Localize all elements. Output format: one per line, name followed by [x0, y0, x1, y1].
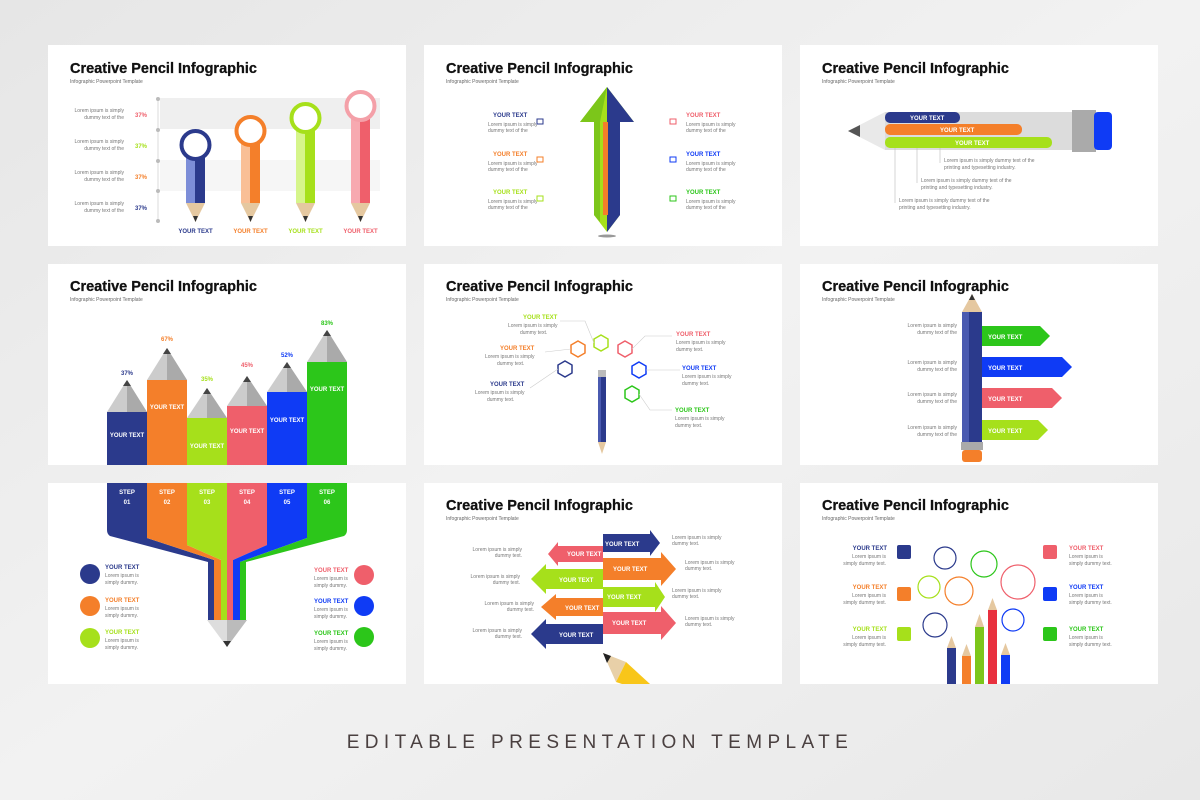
connectors [530, 321, 680, 410]
slide 9: speech bubbles pencils [800, 483, 1158, 684]
bars: 37% [121, 371, 134, 377]
left labels: 37% [135, 206, 148, 212]
leaders and text: Lorem ipsum is simply dummy text of the [944, 158, 1035, 164]
arrow labels: YOUR TEXT [988, 335, 1023, 341]
funnel: STEP [119, 490, 135, 496]
right items: YOUR TEXT [314, 631, 349, 637]
funnel: 05 [284, 500, 291, 506]
footer caption: EDITABLE PRESENTATION TEMPLATE [347, 732, 853, 753]
right items [670, 113, 736, 211]
left items: Lorem ipsum is simply [488, 199, 538, 205]
pencil [848, 110, 1112, 152]
pencil pink: YOUR TEXT [343, 229, 378, 235]
labels [475, 315, 732, 429]
title: Creative Pencil Infographic [446, 279, 633, 295]
left items: YOUR TEXT [493, 190, 528, 196]
slide 6: vertical pencil with arrows [800, 264, 1158, 465]
pencil navy [178, 131, 213, 235]
right items: Lorem ipsum is simply [686, 199, 736, 205]
funnel: 02 [164, 500, 171, 506]
subtitle: Infographic Powerpoint Template [70, 79, 143, 85]
slide 3: horizontal pencil [800, 45, 1158, 246]
slide 8: arrow branches pencil [424, 483, 782, 684]
funnel: 04 [244, 500, 251, 506]
left labels: 37% [135, 113, 148, 119]
subtitle: Infographic Powerpoint Template [822, 297, 895, 303]
pencil orange [233, 117, 268, 235]
pencil [961, 294, 983, 462]
funnel [107, 483, 347, 647]
labels: Lorem ipsum is simply [508, 323, 558, 329]
subtitle: Infographic Powerpoint Template [446, 516, 519, 522]
left arrows: YOUR TEXT [559, 578, 594, 584]
hexagons [558, 335, 646, 402]
side text [471, 535, 735, 640]
pencil lime [288, 104, 323, 235]
bars: YOUR TEXT [110, 433, 144, 439]
side text: dummy text. [672, 541, 699, 547]
right items: dummy text of the [686, 167, 726, 173]
right items: Lorem ipsum is [314, 607, 348, 613]
labels: dummy text. [676, 347, 703, 353]
left text: dummy text of the [917, 367, 957, 373]
right items: YOUR TEXT [686, 152, 721, 158]
right items: YOUR TEXT [686, 190, 721, 196]
funnel: 01 [124, 500, 131, 506]
title: Creative Pencil Infographic [822, 61, 1009, 77]
left items: dummy text of the [488, 128, 528, 134]
left labels: dummy text of the [84, 177, 124, 183]
left items: dummy text of the [488, 205, 528, 211]
left items: Lorem ipsum is [105, 638, 139, 644]
left items: YOUR TEXT [105, 630, 140, 636]
labels: YOUR TEXT [675, 408, 710, 414]
arrow [580, 87, 634, 238]
left items: Lorem ipsum is simply [488, 122, 538, 128]
right list: Lorem ipsum is [1069, 593, 1103, 599]
leaders and text [895, 148, 1035, 211]
left text: dummy text of the [917, 399, 957, 405]
right list: YOUR TEXT [1069, 627, 1104, 633]
labels: Lorem ipsum is simply [676, 340, 726, 346]
right items: YOUR TEXT [686, 113, 721, 119]
side text: Lorem ipsum is simply [685, 560, 735, 566]
leaders and text: printing and typesetting industry. [921, 185, 993, 191]
right arrows: YOUR TEXT [612, 621, 647, 627]
left items: Lorem ipsum is simply [488, 161, 538, 167]
left items: Lorem ipsum is [105, 606, 139, 612]
left list: simply dummy text. [843, 642, 886, 648]
left text [908, 323, 957, 438]
arrow labels: YOUR TEXT [988, 429, 1023, 435]
right items: Lorem ipsum is [314, 639, 348, 645]
left items: YOUR TEXT [105, 565, 140, 571]
leaders and text: Lorem ipsum is simply dummy text of the [899, 198, 990, 204]
pencil [603, 653, 650, 684]
left labels: dummy text of the [84, 208, 124, 214]
bars: YOUR TEXT [270, 418, 304, 424]
right arrows: YOUR TEXT [605, 542, 640, 548]
left labels: dummy text of the [84, 146, 124, 152]
left labels [75, 108, 148, 214]
right list: Lorem ipsum is [1069, 635, 1103, 641]
title: Creative Pencil Infographic [446, 61, 633, 77]
side text: dummy text. [685, 566, 712, 572]
right items: Lorem ipsum is simply [686, 122, 736, 128]
left list [843, 545, 911, 648]
side text: dummy text. [672, 594, 699, 600]
left items: Lorem ipsum is [105, 573, 139, 579]
funnel: STEP [199, 490, 215, 496]
right items: dummy text of the [686, 205, 726, 211]
left list: Lorem ipsum is [852, 593, 886, 599]
side text: Lorem ipsum is simply [473, 628, 522, 634]
left items: dummy text of the [488, 167, 528, 173]
slide 2: arrow pencil [424, 45, 782, 246]
funnel: STEP [319, 490, 335, 496]
right list: simply dummy text. [1069, 600, 1112, 606]
left items [80, 564, 140, 651]
labels: Lorem ipsum is simply [485, 354, 535, 360]
side text: dummy text. [685, 622, 712, 628]
left items: YOUR TEXT [105, 598, 140, 604]
left list: simply dummy text. [843, 561, 886, 567]
right items: dummy text of the [686, 128, 726, 134]
labels: dummy text. [520, 330, 547, 336]
labels: YOUR TEXT [523, 315, 558, 321]
pencil: YOUR TEXT [940, 128, 975, 134]
labels: dummy text. [682, 381, 709, 387]
title: Creative Pencil Infographic [70, 61, 257, 77]
subtitle: Infographic Powerpoint Template [446, 297, 519, 303]
pencil: YOUR TEXT [955, 141, 990, 147]
left labels: Lorem ipsum is simply [75, 108, 124, 114]
right items: Lorem ipsum is [314, 576, 348, 582]
labels: Lorem ipsum is simply [475, 390, 525, 396]
arrow labels: YOUR TEXT [988, 366, 1023, 372]
leaders and text: Lorem ipsum is simply dummy text of the [921, 178, 1012, 184]
left items [488, 113, 543, 211]
left items: simply dummy. [105, 645, 138, 651]
funnel: STEP [279, 490, 295, 496]
right items: YOUR TEXT [314, 568, 349, 574]
side text: dummy text. [495, 553, 522, 559]
right items: simply dummy. [314, 583, 347, 589]
title: Creative Pencil Infographic [446, 498, 633, 514]
left text: Lorem ipsum is simply [908, 323, 957, 329]
labels: Lorem ipsum is simply [682, 374, 732, 380]
left list: YOUR TEXT [853, 546, 887, 552]
left text: Lorem ipsum is simply [908, 360, 957, 366]
side text: Lorem ipsum is simply [471, 574, 520, 580]
bars: YOUR TEXT [150, 405, 184, 411]
bars: 52% [281, 353, 294, 359]
left items: simply dummy. [105, 613, 138, 619]
right list [1043, 545, 1112, 648]
right items: Lorem ipsum is simply [686, 161, 736, 167]
pencil lime: YOUR TEXT [288, 229, 323, 235]
subtitle: Infographic Powerpoint Template [822, 79, 895, 85]
labels: YOUR TEXT [682, 366, 717, 372]
pencil [598, 370, 606, 454]
side text: Lorem ipsum is simply [672, 535, 722, 541]
slide 7: funnel pencil steps [48, 483, 406, 684]
subtitle: Infographic Powerpoint Template [822, 516, 895, 522]
funnel: STEP [159, 490, 175, 496]
left text: Lorem ipsum is simply [908, 392, 957, 398]
right list: Lorem ipsum is [1069, 554, 1103, 560]
right list: simply dummy text. [1069, 642, 1112, 648]
left text: Lorem ipsum is simply [908, 425, 957, 431]
left labels: Lorem ipsum is simply [75, 139, 124, 145]
left items: YOUR TEXT [493, 113, 528, 119]
side text: Lorem ipsum is simply [485, 601, 534, 607]
right list: YOUR TEXT [1069, 585, 1104, 591]
left text: dummy text of the [917, 330, 957, 336]
labels: Lorem ipsum is simply [675, 416, 725, 422]
funnel: 06 [324, 500, 331, 506]
labels: YOUR TEXT [676, 332, 711, 338]
labels: dummy text. [487, 397, 514, 403]
bars: YOUR TEXT [190, 444, 224, 450]
right items: simply dummy. [314, 614, 347, 620]
left arrows: YOUR TEXT [559, 633, 594, 639]
pencil orange: YOUR TEXT [233, 229, 268, 235]
funnel: STEP [239, 490, 255, 496]
pencil: YOUR TEXT [910, 116, 945, 122]
left list: YOUR TEXT [853, 585, 887, 591]
bars [107, 321, 347, 465]
right list: YOUR TEXT [1069, 546, 1104, 552]
left labels: 37% [135, 144, 148, 150]
right arrows: YOUR TEXT [607, 595, 642, 601]
leaders and text: printing and typesetting industry. [944, 165, 1016, 171]
left list: Lorem ipsum is [852, 635, 886, 641]
side text: Lorem ipsum is simply [473, 547, 522, 553]
bubbles [918, 547, 1035, 637]
side text: dummy text. [493, 580, 520, 586]
leaders and text: printing and typesetting industry. [899, 205, 971, 211]
subtitle: Infographic Powerpoint Template [70, 297, 143, 303]
right list: simply dummy text. [1069, 561, 1112, 567]
side text: dummy text. [507, 607, 534, 613]
labels: YOUR TEXT [490, 382, 525, 388]
left labels: Lorem ipsum is simply [75, 201, 124, 207]
title: Creative Pencil Infographic [822, 498, 1009, 514]
subtitle: Infographic Powerpoint Template [446, 79, 519, 85]
side text: Lorem ipsum is simply [685, 616, 735, 622]
bars: 45% [241, 363, 254, 369]
slide 4: pencil bar chart [48, 264, 406, 465]
right arrows: YOUR TEXT [613, 567, 648, 573]
left labels: Lorem ipsum is simply [75, 170, 124, 176]
slide 1: vertical pencil bars [48, 45, 406, 246]
left arrows [531, 542, 603, 649]
bars: YOUR TEXT [230, 429, 264, 435]
side text: dummy text. [495, 634, 522, 640]
left list: simply dummy text. [843, 600, 886, 606]
right items: simply dummy. [314, 646, 347, 652]
pencil navy: YOUR TEXT [178, 229, 213, 235]
bars: 67% [161, 337, 174, 343]
labels: YOUR TEXT [500, 346, 535, 352]
right arrows [603, 530, 676, 640]
left items: YOUR TEXT [493, 152, 528, 158]
left labels: dummy text of the [84, 115, 124, 121]
slide 5: hexagon mind map [424, 264, 782, 465]
left arrows: YOUR TEXT [565, 606, 600, 612]
left arrows: YOUR TEXT [567, 552, 602, 558]
left list: YOUR TEXT [853, 627, 887, 633]
left labels: 37% [135, 175, 148, 181]
pencil pink [343, 92, 378, 235]
bars: YOUR TEXT [310, 387, 344, 393]
right items [314, 565, 374, 652]
title: Creative Pencil Infographic [70, 279, 257, 295]
arrow labels [982, 326, 1072, 440]
right items: YOUR TEXT [314, 599, 349, 605]
arrow labels: YOUR TEXT [988, 397, 1023, 403]
left text: dummy text of the [917, 432, 957, 438]
title: Creative Pencil Infographic [822, 279, 1009, 295]
labels: dummy text. [497, 361, 524, 367]
bars: 83% [321, 321, 334, 327]
side text: Lorem ipsum is simply [672, 588, 722, 594]
labels: dummy text. [675, 423, 702, 429]
pencils [947, 598, 1010, 684]
left list: Lorem ipsum is [852, 554, 886, 560]
left items: simply dummy. [105, 580, 138, 586]
funnel: 03 [204, 500, 211, 506]
bars: 35% [201, 377, 214, 383]
